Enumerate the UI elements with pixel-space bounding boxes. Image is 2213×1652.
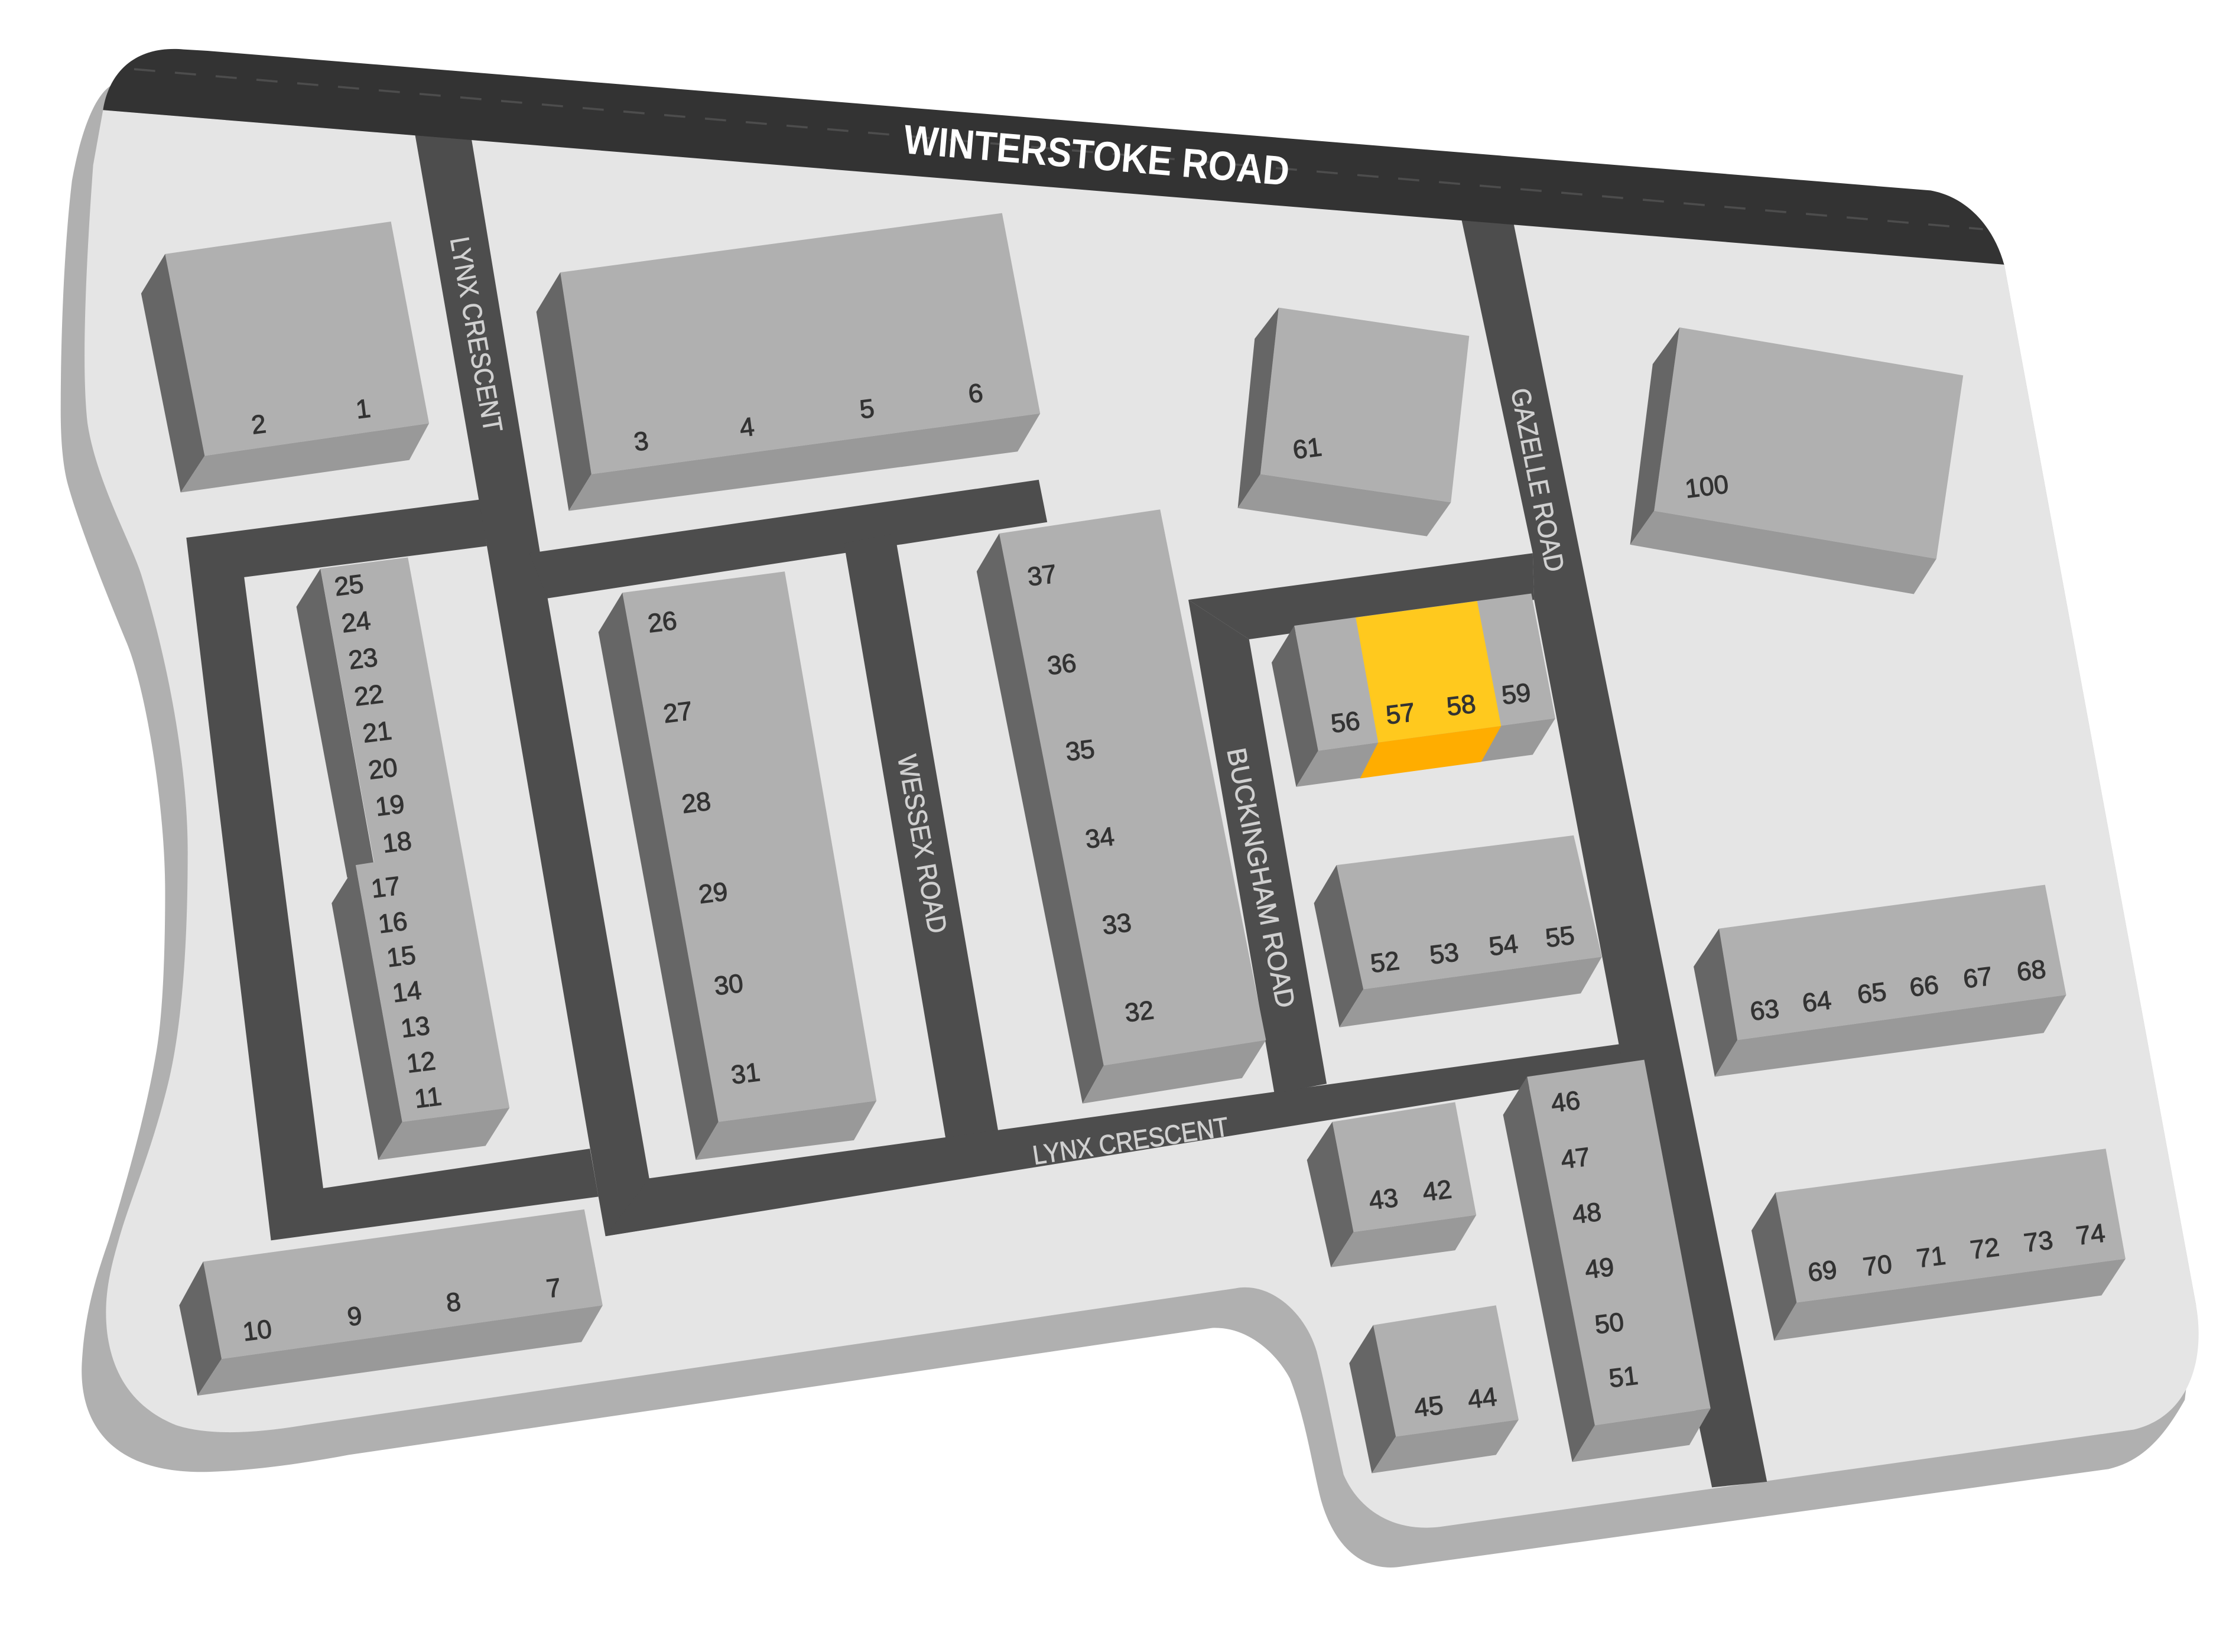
building: units 46-51: 48 xyxy=(1571,1198,1603,1230)
building: units 26-31: 28 xyxy=(680,787,713,819)
building: units 11-25: 25 xyxy=(333,570,365,601)
road label: Gazelle Road: GAZELLE ROAD xyxy=(1505,386,1570,574)
building: units 63-68: 68 xyxy=(2015,955,2048,987)
building: units 32-37: 35 xyxy=(1064,734,1096,767)
road label: Wessex Road: WESSEX ROAD xyxy=(892,753,953,935)
building: units 11-25: 15 xyxy=(385,941,417,973)
building: units 63-68: 64 xyxy=(1801,986,1833,1018)
building: units 69-74: 69 xyxy=(1806,1255,1839,1287)
building: units 3-6: 6 xyxy=(967,378,984,409)
building: units 42-43: 42 xyxy=(1421,1175,1453,1207)
building: units 32-37 xyxy=(977,509,1266,1104)
road label: Lynx Crescent south: LYNX CRESCENT xyxy=(1031,1111,1230,1170)
road label: Lynx Crescent north: LYNX CRESCENT xyxy=(444,235,508,434)
building: units 11-25: 20 xyxy=(367,753,399,785)
building: units 11-25: 24 xyxy=(340,606,372,638)
building: units 11-25: 22 xyxy=(353,679,385,712)
building: units 26-31: 30 xyxy=(713,969,745,1001)
building: units 46-51: 49 xyxy=(1583,1253,1616,1284)
building: units 52-55: 52 xyxy=(1369,946,1401,978)
building: units 56-59 with highlighted 57-58: 58 xyxy=(1445,690,1477,721)
building: units 52-55: 53 xyxy=(1428,938,1460,970)
building: units 26-31: 27 xyxy=(662,697,694,729)
building: units 3-6: 3 xyxy=(632,427,650,457)
building: units 63-68: 67 xyxy=(1961,962,1994,994)
building: units 44-45 xyxy=(1349,1305,1519,1473)
building: units 42-43: 43 xyxy=(1367,1183,1400,1215)
building: units 11-25: 21 xyxy=(361,716,394,749)
building: units 56-59 with highlighted 57-58: 57 xyxy=(1385,698,1416,730)
building: units 11-25: 16 xyxy=(376,907,409,939)
highlight: units 57-58 front xyxy=(1360,726,1501,778)
building: units 11-25: 14 xyxy=(391,976,423,1008)
building: units 11-25: 13 xyxy=(399,1011,431,1043)
building: units 44-45: 44 xyxy=(1466,1382,1499,1414)
building: units 7-10: 7 xyxy=(545,1273,563,1303)
building: units 63-68: 65 xyxy=(1855,977,1888,1010)
Winterstoke Road: WINTERSTOKE ROAD xyxy=(902,116,1291,194)
building: units 52-55 xyxy=(1314,835,1602,1027)
building: units 46-51: 51 xyxy=(1607,1361,1640,1393)
building: units 1-2: 2 xyxy=(250,409,268,440)
building: units 32-37: 34 xyxy=(1084,822,1116,854)
building: units 11-25: 23 xyxy=(347,643,379,675)
building: units 46-51 xyxy=(1503,1060,1711,1462)
building: units 3-6: 5 xyxy=(858,394,876,424)
building: units 46-51: 46 xyxy=(1549,1086,1582,1118)
building: units 69-74: 71 xyxy=(1915,1241,1947,1273)
building: units 56-59 with highlighted 57-58 xyxy=(1272,594,1555,787)
building: unit 61: 61 xyxy=(1291,432,1324,465)
building: units 56-59 with highlighted 57-58: 59 xyxy=(1500,678,1532,710)
building: units 69-74: 72 xyxy=(1968,1233,2001,1265)
building: units 32-37: 33 xyxy=(1101,908,1133,941)
building: units 56-59 with highlighted 57-58: 56 xyxy=(1329,706,1361,739)
building: units 32-37: 37 xyxy=(1026,560,1058,592)
building: units 11-25 xyxy=(297,557,509,1160)
building: units 46-51: 50 xyxy=(1593,1308,1626,1339)
building: units 3-6 xyxy=(537,213,1040,511)
building: units 44-45: 45 xyxy=(1412,1391,1445,1423)
building: units 63-68 xyxy=(1694,885,2066,1077)
building: units 7-10: 10 xyxy=(241,1315,274,1347)
building: units 7-10 xyxy=(179,1209,603,1396)
building: units 1-2 xyxy=(141,222,429,493)
side road network xyxy=(186,134,1767,1487)
building: units 52-55: 54 xyxy=(1487,929,1520,961)
building: units 7-10: 9 xyxy=(346,1301,363,1332)
building: unit 100: 100 xyxy=(1684,470,1730,504)
building: units 69-74: 73 xyxy=(2022,1225,2055,1258)
building: units 7-10: 8 xyxy=(444,1287,463,1318)
building: units 69-74: 74 xyxy=(2075,1218,2107,1251)
building: units 46-51: 47 xyxy=(1559,1142,1592,1175)
building: units 11-25: 17 xyxy=(369,871,402,903)
road label: Buckingham Road: BUCKINGHAM ROAD xyxy=(1221,746,1301,1010)
building: units 63-68: 66 xyxy=(1908,970,1940,1003)
building: units 11-25: 11 xyxy=(413,1082,443,1114)
building: units 69-74: 70 xyxy=(1861,1250,1894,1282)
building: units 26-31: 31 xyxy=(729,1058,762,1090)
building: units 1-2: 1 xyxy=(354,394,372,424)
building: units 3-6: 4 xyxy=(738,412,756,443)
building: units 69-74 xyxy=(1751,1149,2126,1341)
building: unit 100 xyxy=(1630,327,1963,594)
building: units 42-43 xyxy=(1307,1102,1476,1267)
building: units 32-37: 36 xyxy=(1045,648,1078,681)
building: units 11-25: 19 xyxy=(374,789,406,822)
Winterstoke Road xyxy=(103,49,2004,265)
building: units 11-25: 12 xyxy=(405,1046,437,1079)
building: units 26-31: 29 xyxy=(697,877,729,909)
building: units 11-25: 18 xyxy=(381,826,413,858)
building: units 26-31 xyxy=(599,571,876,1160)
building: unit 61 xyxy=(1238,308,1469,536)
building: units 52-55: 55 xyxy=(1544,921,1576,953)
building: units 63-68: 63 xyxy=(1749,994,1781,1026)
building: units 32-37: 32 xyxy=(1123,996,1156,1028)
highlight: units 57-58 roof xyxy=(1356,601,1501,743)
building: units 26-31: 26 xyxy=(646,606,678,638)
